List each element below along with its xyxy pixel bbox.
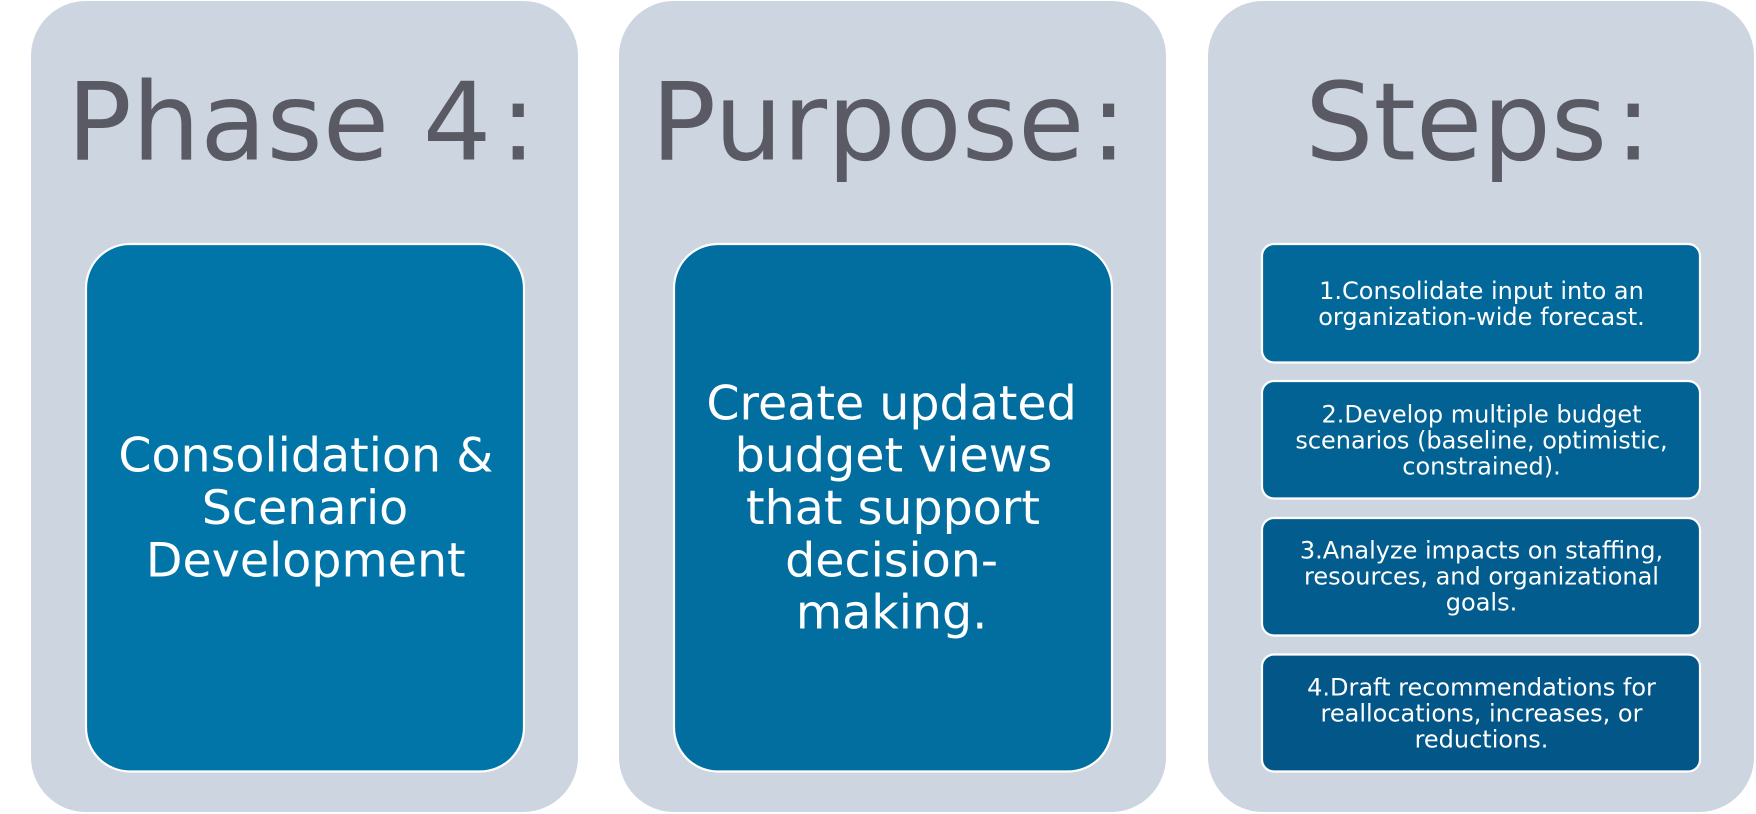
card: consolidation and scenario development: [86, 244, 524, 772]
panel: purpose: [619, 1, 1166, 812]
step 4: [1262, 654, 1700, 772]
heading: Phase 4: :: [500, 60, 536, 186]
step 3: resources, and organizational: [1304, 563, 1659, 591]
heading: Phase 4: Phase: [67, 60, 389, 186]
card: purpose description: Create updated: [706, 376, 1077, 431]
step 2: scenarios (baseline, optimistic,: [1295, 427, 1668, 455]
step 1: organization-wide forecast.: [1318, 303, 1645, 331]
step 3: [1262, 518, 1700, 636]
card: consolidation and scenario development: Consolidation &: [118, 429, 493, 484]
panel: steps: [1208, 1, 1754, 812]
heading: Purpose: :: [1090, 60, 1127, 186]
heading: Purpose: Purpose: [651, 60, 1084, 186]
step 4: reductions.: [1415, 726, 1548, 754]
card: purpose description: making.: [796, 586, 987, 640]
heading: Steps: :: [1615, 60, 1651, 186]
step 2: constrained).: [1402, 453, 1561, 481]
step 3: goals.: [1446, 589, 1517, 617]
card: consolidation and scenario development: Development: [146, 534, 466, 589]
card: purpose description: that support: [746, 481, 1040, 536]
step 1: [1262, 244, 1700, 362]
panel: phase 4: [31, 1, 578, 812]
card: purpose description: budget views: [735, 428, 1052, 484]
step 1: 1.Consolidate input into an: [1319, 277, 1644, 305]
step 2: 2.Develop multiple budget: [1321, 401, 1642, 429]
card: purpose description: [674, 244, 1112, 772]
heading: Steps: Steps: [1305, 60, 1607, 186]
step 4: reallocations, increases, or: [1321, 700, 1643, 728]
step 3: 3.Analyze impacts on staffing,: [1300, 537, 1663, 565]
heading: Phase 4: 4: [423, 60, 491, 186]
step 2: [1262, 381, 1700, 498]
card: consolidation and scenario development: Scenario: [202, 481, 408, 536]
card: purpose description: decision-: [785, 534, 998, 588]
step 4: 4.Draft recommendations for: [1307, 674, 1656, 702]
